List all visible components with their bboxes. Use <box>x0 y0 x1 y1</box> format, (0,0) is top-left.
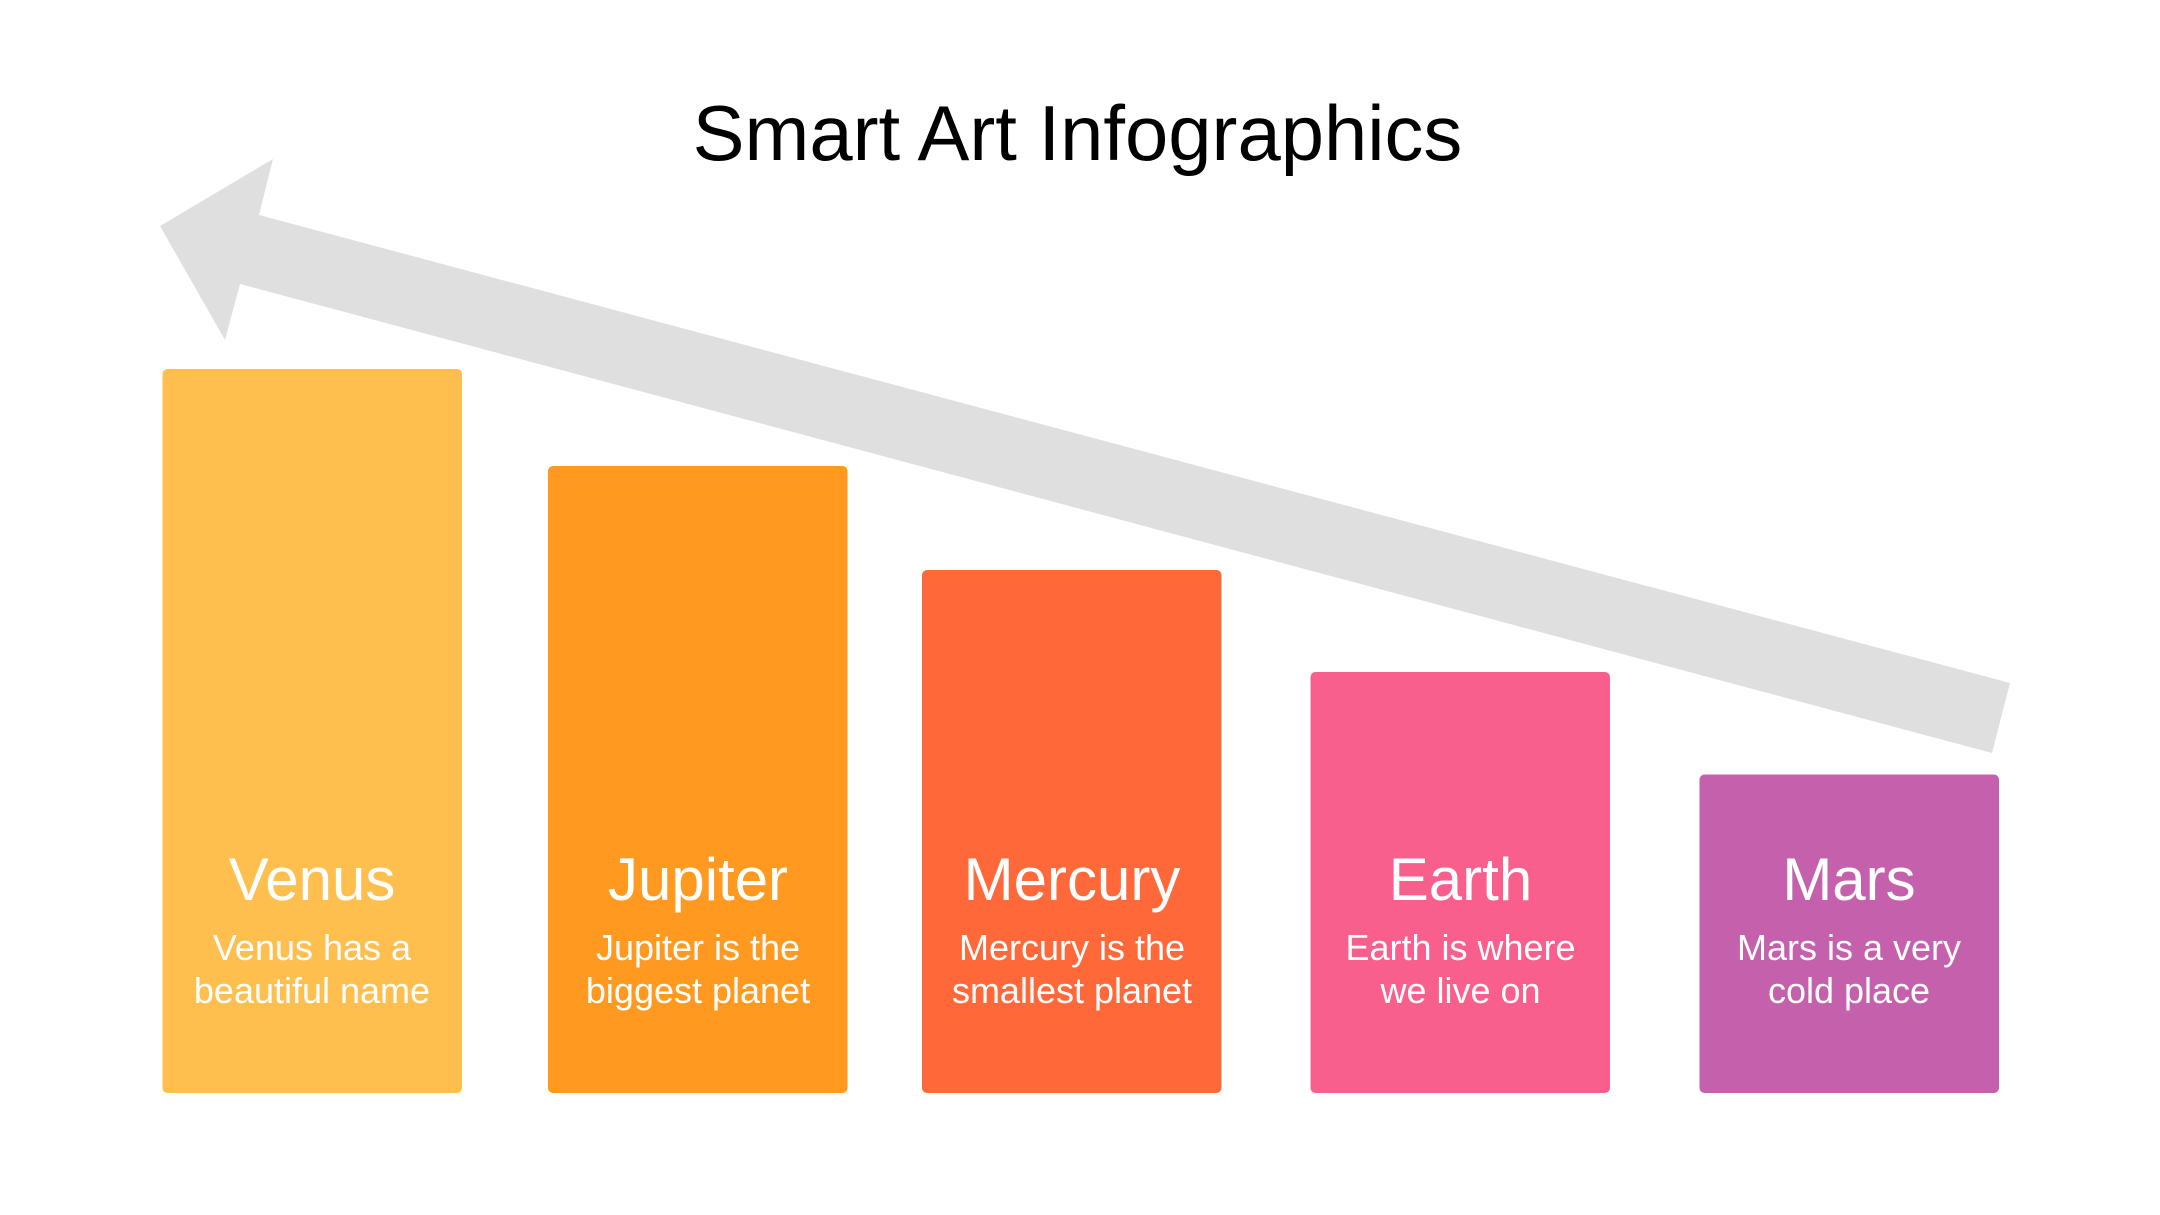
bar: Jupiter <box>548 466 848 1093</box>
bar: Mars <box>1700 774 1999 1093</box>
title: Smart Art Infographics <box>693 91 1462 177</box>
arrow: descending trend pointing to the upper left <box>160 159 2010 753</box>
panel: Venus <box>162 369 462 1093</box>
text: Mercury description: smallest planet <box>952 970 1192 1011</box>
panel: Mars <box>1700 774 1999 1093</box>
text: Jupiter description: biggest planet <box>586 970 810 1011</box>
bar: Mercury <box>922 570 1222 1093</box>
text: Venus description: Venus has a <box>213 927 412 968</box>
text: Mercury description: Mercury is the <box>959 927 1185 968</box>
text: Venus description: beautiful name <box>194 970 430 1011</box>
heading: Mercury: Mercury <box>964 846 1180 913</box>
text: Earth description: Earth is where <box>1345 927 1576 968</box>
heading: Jupiter: Jupiter <box>608 846 788 913</box>
heading: Earth: Earth <box>1389 846 1532 913</box>
bar: Venus <box>162 369 462 1093</box>
panel: Jupiter <box>548 466 848 1093</box>
heading: Venus: Venus <box>229 846 395 913</box>
panel: Earth <box>1310 672 1610 1093</box>
bar: Earth <box>1310 672 1610 1093</box>
text: Mars description: cold place <box>1768 970 1930 1011</box>
panel: Mercury <box>922 570 1222 1093</box>
text: Mars description: Mars is a very <box>1737 927 1961 968</box>
text: Jupiter description: Jupiter is the <box>596 927 800 968</box>
text: Earth description: we live on <box>1379 970 1541 1011</box>
heading: Mars: Mars <box>1782 846 1916 913</box>
